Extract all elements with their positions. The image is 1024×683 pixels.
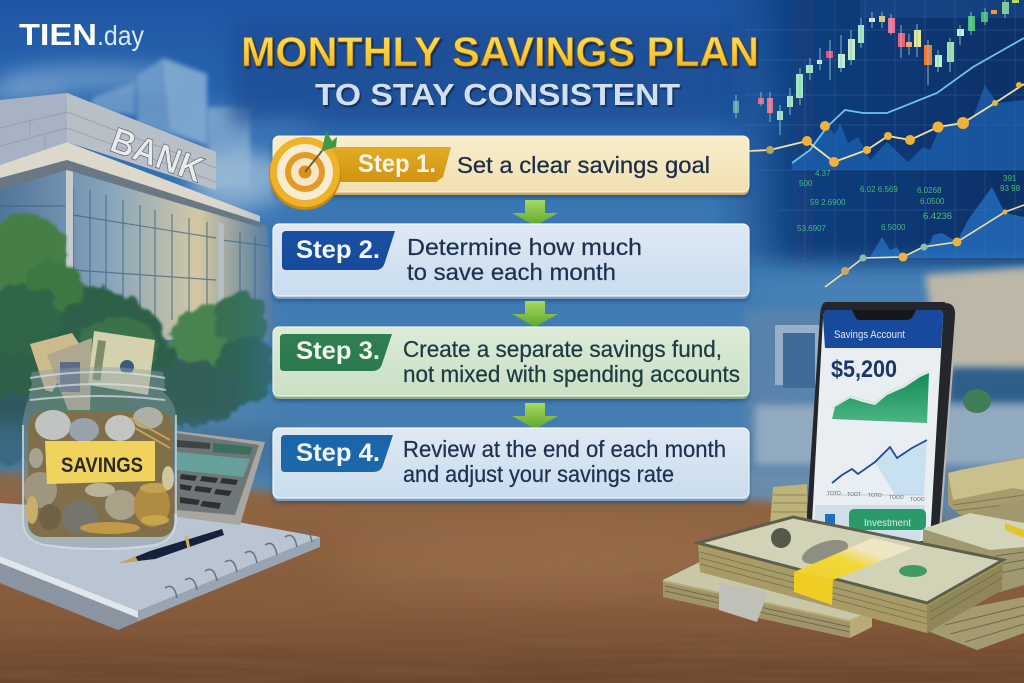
step 1 label: Step 1.: [358, 150, 436, 178]
jar label: [45, 441, 155, 484]
market numbers: 6.02 6.569: [860, 185, 898, 194]
cash in jar: [30, 331, 155, 410]
right mid stack: [922, 500, 1024, 592]
phone notch: [852, 310, 916, 320]
bank sign: BANK: [105, 119, 209, 190]
background: haze over lower trees: [0, 425, 290, 475]
chart dots: [766, 82, 1022, 167]
arrow 1: [512, 200, 558, 226]
step 4 text: [403, 436, 726, 487]
logo: [19, 17, 144, 52]
balance: $5,200: [831, 356, 897, 383]
step 3 label: Step 3.: [296, 337, 380, 365]
step 1 text: Set a clear savings goal: [457, 152, 710, 178]
market numbers: 391: [1003, 174, 1017, 183]
step 4 badge: [281, 435, 393, 472]
step 4 text: and adjust your savings rate: [403, 461, 674, 487]
step 2 card: [273, 224, 749, 299]
market numbers: 93 98: [1000, 184, 1021, 193]
cash stacks: [663, 457, 1024, 650]
market numbers: 500: [799, 179, 813, 188]
icon: target with dart: [269, 131, 341, 210]
back stack left: [770, 484, 807, 524]
coins: [23, 407, 174, 537]
yellow band: [794, 538, 913, 580]
step 2 label: Step 2.: [296, 236, 380, 264]
background: distant towers: [92, 58, 250, 187]
market numbers: 6.0268: [917, 186, 942, 195]
main front stack: [698, 517, 1003, 633]
market numbers: [797, 169, 1021, 233]
step 3 text: [403, 336, 740, 387]
background: clouds: [0, 64, 320, 210]
arrow 3: [512, 403, 558, 429]
savings jar: [22, 331, 176, 549]
step 4 label: Step 4.: [296, 439, 380, 467]
chart axis labels: TOOO: [889, 495, 904, 501]
step 4 text: Review at the end of each month: [403, 436, 726, 462]
app header: [823, 310, 943, 348]
line chart lower: [825, 205, 1024, 287]
line chart light blue: [792, 38, 1024, 163]
step 3 badge: [280, 334, 392, 371]
lower left stack: [663, 562, 872, 638]
arrow 2: [512, 301, 558, 327]
step 1 card: [273, 136, 749, 195]
market numbers: 6.5000: [881, 223, 906, 232]
logo: TIEN: [19, 17, 97, 52]
step 3 text: not mixed with spending accounts: [403, 361, 740, 387]
background: trading dashboard: [715, 0, 1024, 287]
chart axis labels: TOTO: [827, 491, 841, 497]
green area chart: [832, 371, 929, 423]
candlesticks: [733, 0, 1019, 135]
background: street behind phone: [745, 265, 1024, 510]
chart axis labels: TOOO: [910, 497, 925, 503]
title: MONTHLY SAVINGS PLAN: [241, 28, 759, 75]
background: title band: [230, 20, 750, 125]
app icon: [825, 514, 835, 524]
market numbers: 53.6907: [797, 224, 826, 233]
background: center wash: [260, 200, 760, 520]
market numbers: 6.4236: [923, 211, 952, 222]
back stack right: [948, 457, 1024, 520]
chart dots lower: [841, 210, 1008, 275]
chart axis labels: TOTO: [868, 493, 882, 499]
step 2 text: Determine how much: [407, 234, 642, 260]
step 2 text: [407, 234, 642, 285]
background: bank building: [0, 93, 275, 340]
step 3 text: Create a separate savings fund,: [403, 336, 722, 362]
step 3 card: [273, 327, 749, 399]
chart axis labels: TOOT: [847, 492, 861, 498]
area chart lower: [870, 187, 1024, 258]
calculator: [177, 431, 265, 525]
app header text: Savings Account: [834, 329, 905, 341]
background: wooden table: [0, 470, 1024, 683]
chart axis labels: [827, 491, 925, 503]
step 2 badge: [282, 231, 395, 270]
jar glass highlights: [23, 372, 176, 549]
subtitle: TO STAY CONSISTENT: [315, 77, 680, 112]
logo: .day: [97, 20, 144, 51]
background: trees: [0, 213, 273, 465]
market numbers: 6.0500: [920, 197, 945, 206]
line chart yellow: [749, 84, 1024, 162]
silver band: [719, 583, 768, 622]
phone: [806, 302, 956, 545]
jar label text: SAVINGS: [61, 454, 143, 477]
investment button: Investment: [864, 518, 911, 529]
blue area chart: [826, 440, 927, 495]
right lower stack: [930, 597, 1024, 650]
market numbers: 4.37: [815, 169, 831, 178]
app bottom bar: [814, 505, 925, 545]
area chart upper: [792, 85, 1024, 170]
pen: [120, 529, 224, 563]
notepad: [0, 503, 320, 630]
background: sky: [0, 0, 1024, 540]
market numbers: 59 2.6900: [810, 198, 846, 207]
investment button: [849, 509, 926, 530]
step 1 badge: [322, 147, 451, 182]
step 2 text: to save each month: [407, 259, 616, 285]
step 4 card: [273, 428, 749, 501]
